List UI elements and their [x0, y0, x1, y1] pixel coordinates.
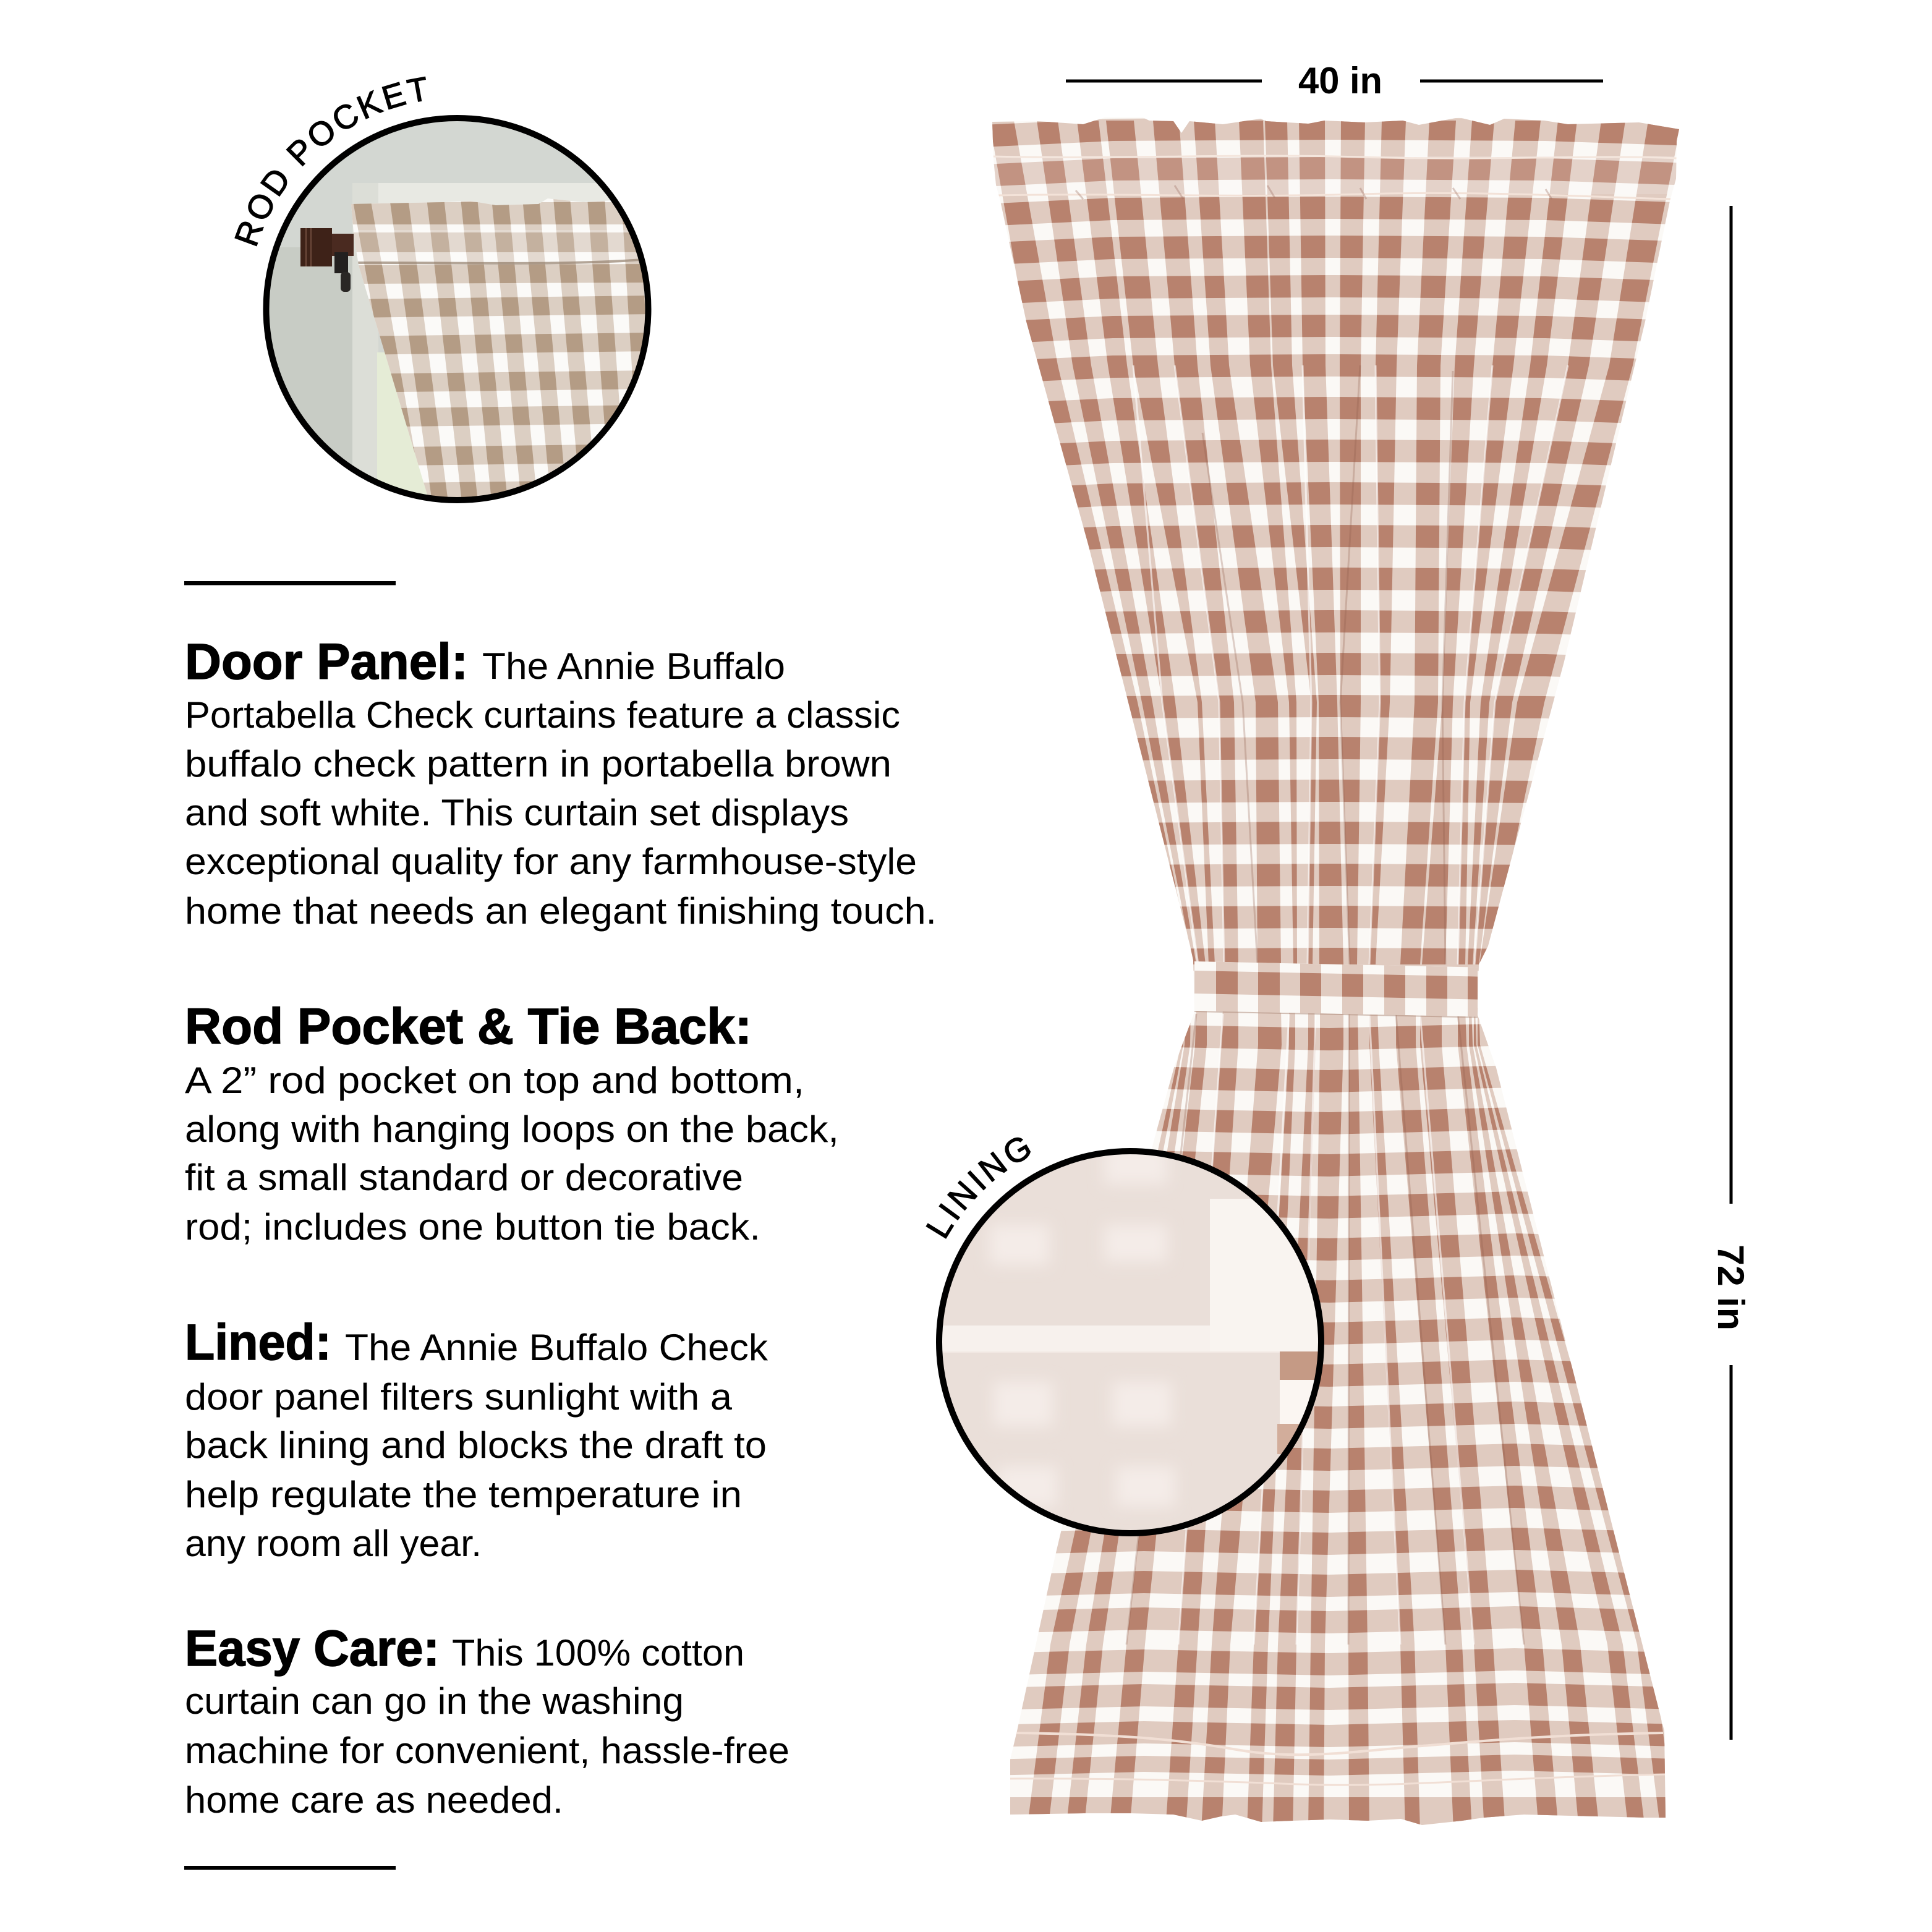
width value: 40 in: [1298, 60, 1382, 101]
label: rod pocket: ROD POCKET: [234, 77, 426, 246]
heading: Rod Pocket & Tie Back:: [185, 998, 752, 1055]
heading: Door Panel:: [185, 634, 468, 690]
body: This 100% cotton: [452, 1632, 744, 1674]
tie back: [1194, 961, 1478, 1018]
bottom rule: [184, 1866, 396, 1870]
heading: Lined:: [185, 1314, 331, 1371]
fabric peek: [1280, 1351, 1318, 1380]
body: help regulate the temperature in: [185, 1474, 742, 1515]
body: [185, 1632, 789, 1821]
body: A 2” rod pocket on top and bottom,: [185, 1060, 804, 1101]
pleat folds: [1133, 365, 1568, 1645]
bottom rod pocket gathers: [1015, 1733, 1663, 1755]
hem band: [942, 1326, 1210, 1351]
body: back lining and blocks the draft to: [185, 1424, 767, 1466]
label: lining: LINING: [926, 1138, 1031, 1239]
body: Portabella Check curtains feature a classic: [185, 694, 900, 736]
curtain door panel: [983, 111, 1700, 1836]
text block: door panel: [185, 634, 937, 932]
body: curtain can go in the washing: [185, 1680, 684, 1722]
body: [185, 1060, 839, 1248]
body: exceptional quality for any farmhouse-style: [185, 841, 917, 882]
body: and soft white. This curtain set displays: [185, 792, 849, 833]
text block: rod pocket and tie back: [185, 998, 839, 1248]
text block: lined: [185, 1314, 768, 1564]
body: any room all year.: [185, 1523, 482, 1564]
height value: 72 in: [1710, 1245, 1751, 1330]
detail circle: lining: [934, 1147, 1329, 1543]
body: home that needs an elegant finishing touch.: [185, 890, 937, 932]
body: buffalo check pattern in portabella brown: [185, 743, 892, 785]
body: home care as needed.: [185, 1779, 563, 1821]
window frame: [378, 183, 610, 205]
detail circle: rod pocket: [260, 111, 657, 513]
folded corner panel: [1210, 1199, 1317, 1326]
text block: easy care: [185, 1620, 789, 1821]
rod pocket sheen: [983, 156, 1694, 194]
body: [185, 1327, 768, 1564]
body: fit a small standard or decorative: [185, 1157, 743, 1198]
body: along with hanging loops on the back,: [185, 1109, 839, 1150]
body: machine for convenient, hassle-free: [185, 1730, 789, 1771]
curtain rod and bracket: [300, 228, 354, 292]
body: door panel filters sunlight with a: [185, 1376, 733, 1418]
body: The Annie Buffalo: [482, 645, 785, 687]
body: rod; includes one button tie back.: [185, 1206, 760, 1248]
heading: Easy Care:: [185, 1620, 440, 1677]
top rule: [184, 581, 396, 585]
body: The Annie Buffalo Check: [345, 1327, 768, 1368]
body: [185, 645, 937, 932]
